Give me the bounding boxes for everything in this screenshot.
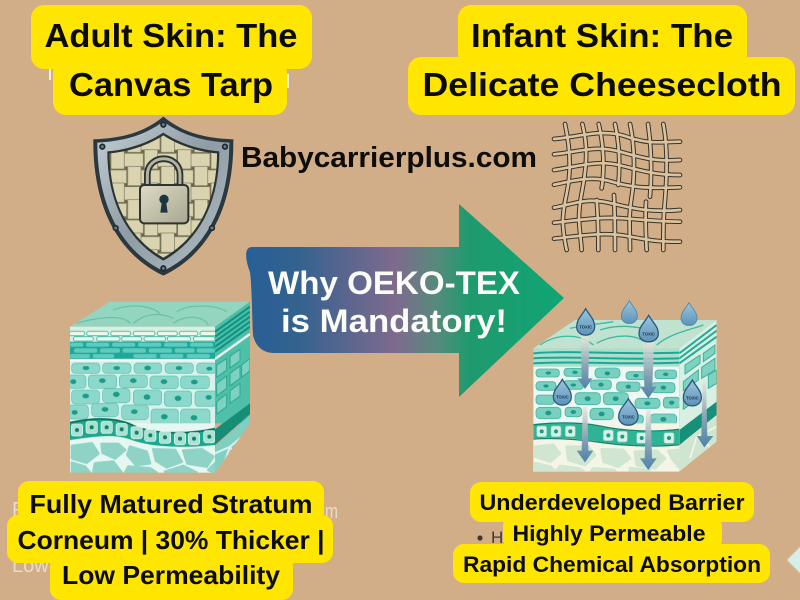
diagram: infant skin cube with toxin drops: TOXIC xyxy=(686,395,699,400)
heading: infant skin: Delicate Cheesecloth xyxy=(422,66,782,103)
ghost text behind the left caption: F xyxy=(12,499,24,521)
caption: infant skin properties: Underdeveloped Barrier xyxy=(480,490,745,515)
arrow: why OEKO-TEX is mandatory: Why OEKO-TEX xyxy=(268,265,521,301)
cube right face layers xyxy=(215,302,250,473)
heading: adult skin xyxy=(31,5,312,115)
cube front face layers xyxy=(533,348,680,472)
pale diamond at right edge xyxy=(787,547,800,573)
diagram: infant skin cube with toxin drops xyxy=(533,301,717,472)
caption: infant skin properties: Highly Permeable xyxy=(512,521,706,546)
caption: adult skin properties: Fully Matured Stratum xyxy=(30,489,312,519)
diagram: infant skin cube with toxin drops: TOXIC xyxy=(556,395,569,400)
website label: Babycarrierplus.com xyxy=(241,142,537,174)
cube right face layers xyxy=(679,320,717,472)
caption: adult skin properties: Low Permeability xyxy=(62,560,281,590)
plain toxin drops xyxy=(621,301,697,325)
diagram: infant skin cube with toxin drops: TOXIC xyxy=(579,325,592,330)
arrow: why OEKO-TEX is mandatory: is Mandatory! xyxy=(281,303,507,339)
cube top face xyxy=(533,320,717,348)
ghost text behind the left caption xyxy=(12,499,338,577)
toxin penetration arrows xyxy=(577,337,713,470)
caption: adult skin properties xyxy=(7,481,333,600)
heading: infant skin xyxy=(408,5,795,115)
diagram: adult skin cube xyxy=(68,302,250,473)
cube top face xyxy=(70,302,250,327)
ghost text behind the left caption: Low xyxy=(12,555,49,577)
heading: infant skin: Infant Skin: The xyxy=(471,17,733,54)
cube front face layers xyxy=(68,327,217,473)
caption: infant skin properties xyxy=(453,482,770,583)
stray bullet glyph xyxy=(477,528,503,547)
diagram: infant skin cube with toxin drops: TOXIC xyxy=(642,331,655,336)
caption: adult skin properties: Corneum | 30% Thicker | xyxy=(18,525,324,555)
icon: woven shield with padlock xyxy=(93,117,233,276)
diagram: infant skin cube with toxin drops: TOXIC xyxy=(622,415,635,420)
ghost text behind the left caption: m xyxy=(325,501,338,523)
stray bullet glyph: H xyxy=(491,528,503,547)
heading: adult skin: Canvas Tarp xyxy=(69,66,273,103)
arrow: why OEKO-TEX is mandatory xyxy=(246,204,564,397)
caption: infant skin properties: Rapid Chemical Absorption xyxy=(463,552,761,577)
heading: adult skin: Adult Skin: The xyxy=(44,17,298,54)
labelled toxin drops xyxy=(553,309,701,425)
icon: loose cheesecloth mesh xyxy=(554,124,680,250)
